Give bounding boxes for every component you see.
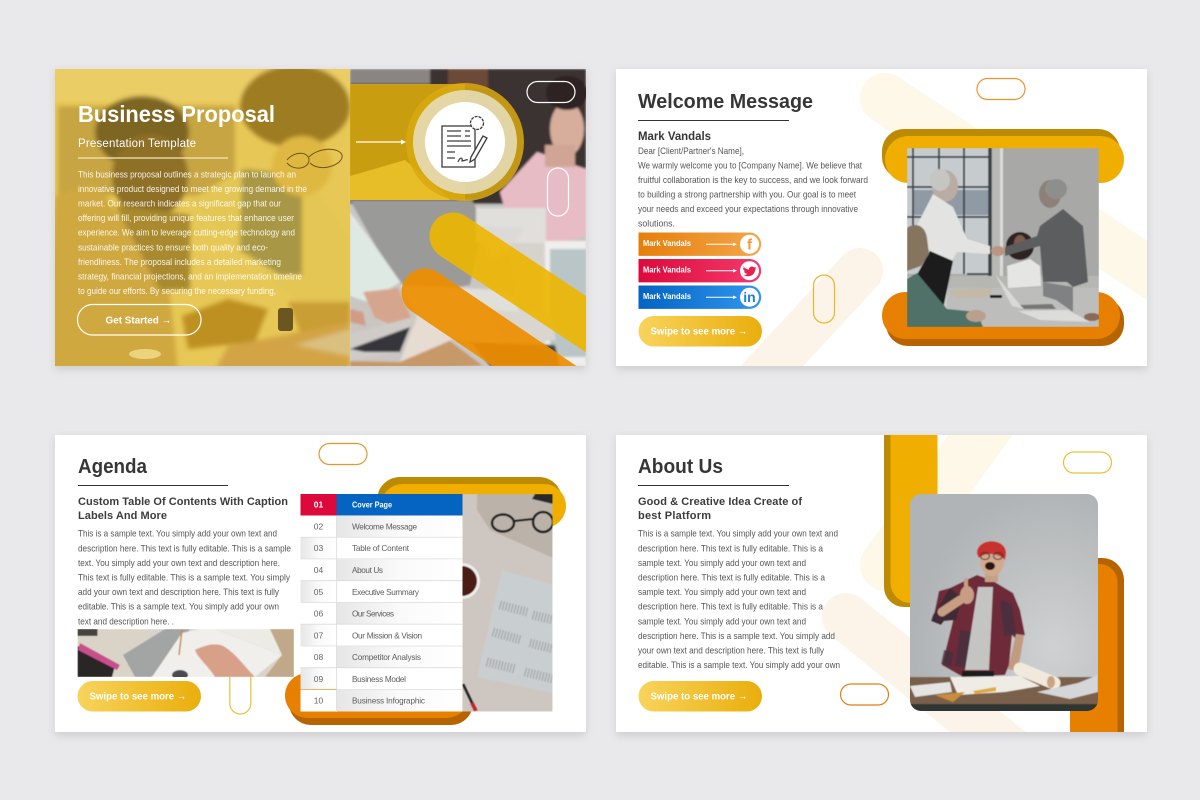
outline pill: top (319, 444, 367, 464)
text block: proposal description: friendliness. The proposal includes a detailed marketing (78, 257, 281, 267)
text block: agenda description: text. You simply add your own text and description here. (78, 558, 280, 568)
text block: proposal description: innovative product designed to meet the growing demand in the (78, 184, 307, 194)
button: swipe to see more (78, 681, 201, 712)
social bar: linkedin: Mark Vandals (643, 292, 692, 301)
title: About Us (638, 456, 723, 478)
outline pill: vertical (814, 275, 834, 323)
outline pill: bottom (840, 684, 888, 705)
blueprints and papers on desk (950, 676, 1040, 695)
row 1 highlighted: Cover Page (352, 501, 392, 510)
yellow overlay band (350, 84, 465, 200)
row 3: 03 (314, 543, 323, 553)
table: agenda contents (300, 494, 462, 712)
subheading (78, 497, 288, 519)
outline pill: top (977, 78, 1025, 100)
row 2: Welcome Message (352, 522, 417, 532)
text block: proposal description: to guide our efforts. By securing the necessary funding, (78, 286, 276, 296)
raised arm with thumb (942, 600, 960, 612)
row 5 (300, 581, 420, 602)
row 3: Table of Content (352, 544, 410, 553)
row 6: 06 (314, 608, 323, 618)
decorative stripe: pale lower diagonal (846, 617, 1010, 750)
social bar: twitter: Mark Vandals (643, 266, 692, 274)
text block: proposal description (78, 169, 307, 296)
social bar: facebook: Mark Vandals (643, 239, 692, 248)
text block: welcome letter: your needs and exceed your expectations through innovative (638, 204, 858, 214)
outline pill: top right (1064, 452, 1112, 473)
social bar: linkedin (638, 286, 761, 309)
text block: welcome letter: solutions. (638, 218, 675, 228)
laptop and table (996, 276, 1024, 309)
text block: proposal description: strategy, financial projections, and an implementation timeline (78, 272, 302, 282)
man in white shirt (932, 170, 958, 202)
row 5: 05 (314, 587, 323, 597)
row 4: 04 (314, 565, 323, 575)
decorative stripe: pale upper diagonal (885, 98, 1180, 292)
button: swipe to see more: Swipe to see more → (90, 690, 186, 702)
photo: colleagues under yellow overlay (45, 60, 355, 370)
text block: about description: sample text. You simply add your own text and (638, 616, 806, 626)
button: get started: Get Started → (106, 314, 172, 326)
woman seated centre (1006, 232, 1034, 260)
subtitle: Presentation Template (78, 138, 196, 150)
row 10: 10 (314, 696, 323, 706)
arrow: to icon (356, 140, 406, 144)
decorative stripe: pale upper diagonal (886, 400, 1006, 565)
title: Business Proposal (78, 101, 275, 127)
social bar: facebook: f (747, 236, 753, 254)
row 1 highlighted: 01 (314, 500, 323, 510)
photo: handshake in office (907, 148, 1100, 327)
text block: agenda description: add your own text and description here. This text is fully (78, 587, 279, 597)
button: swipe to see more: Swipe to see more → (650, 326, 748, 338)
row 8: Competitor Analysis (352, 653, 421, 662)
text block: proposal description: experience. We aim to leverage cutting-edge technology and (78, 228, 295, 238)
text block: welcome letter (638, 146, 868, 228)
text block: agenda description (78, 529, 291, 626)
decorative stripe: yellow diagonal (453, 236, 640, 360)
text block: proposal description: This business proposal outlines a strategic plan to launch an (78, 169, 296, 179)
subheading: Labels And More (78, 510, 167, 522)
row 3 (300, 538, 462, 558)
row 6: Our Services (352, 610, 394, 618)
backing shape: yellow roll (377, 477, 566, 528)
social bar: facebook (638, 232, 761, 256)
row 4 (314, 560, 462, 580)
panel: agenda slide (55, 435, 586, 732)
row 8 (314, 646, 462, 668)
woman foreground (907, 225, 929, 271)
subheading: Custom Table Of Contents With Caption (78, 496, 288, 508)
subheading (638, 496, 802, 522)
button: get started (78, 304, 201, 335)
button: swipe to see more (638, 681, 762, 712)
panel: about us slide (616, 400, 1147, 750)
row 4: About Us (352, 566, 383, 575)
icon: document with gear and pen badge (406, 83, 524, 201)
row 7: 07 (314, 630, 323, 640)
panel: business proposal cover slide (55, 69, 586, 366)
row 8: 08 (314, 652, 323, 662)
man in grey sweater (1039, 180, 1061, 208)
photo: smiling builder at desk (905, 490, 1103, 715)
row 2 (314, 516, 462, 537)
text block: welcome letter: Dear [Client/Partner's Name], (638, 146, 744, 156)
row 7 (300, 624, 422, 646)
text block: about description: description here. This text is fully editable. This is a (638, 543, 824, 553)
row 9: 09 (314, 674, 323, 684)
photo: office team with laptop and yellow band (350, 69, 588, 370)
backing shape: yellow bar (884, 425, 938, 607)
button: swipe to see more: Swipe to see more → (650, 690, 748, 702)
outline pill: vertical under photo (230, 677, 251, 714)
text block: about description: description here. This text is fully editable. This is a (638, 602, 824, 612)
text block: welcome letter: fruitful collaboration is the key to success, and we look forward (638, 175, 868, 185)
shirt (934, 575, 1025, 677)
row 10 (314, 690, 462, 712)
row 1 highlighted (300, 494, 462, 516)
other arm (1008, 634, 1024, 671)
text block: agenda description: This is a sample text. You simply add your own text and (78, 529, 277, 539)
row 10: Business Infographic (352, 696, 425, 706)
text block: about description: description here. This is a sample text. You simply add (638, 631, 835, 641)
text block: about description: This is a sample text. You simply add your own text and (638, 529, 838, 539)
photo: hand with pencil on charts (78, 629, 294, 680)
text block: welcome letter: to building a strong partnership with you. Our goal is to meet (638, 190, 856, 200)
social bar: twitter (638, 259, 761, 282)
backing shape: orange roll (285, 673, 473, 725)
decorative stripe: orange diagonal (425, 292, 570, 390)
decorative stripe: pale lower diagonal (745, 271, 860, 395)
title: Agenda (78, 456, 148, 478)
text block: welcome letter: We warmly welcome you to [Company Name]. We believe that (638, 160, 862, 170)
text block: agenda description: description here. This text is fully editable. This is a sample (78, 543, 291, 553)
scroll frame: top yellow roll (882, 129, 1124, 183)
text block: about description: sample text. You simply add your own text and (638, 587, 806, 597)
text block: proposal description: offering will fill, providing unique features that enhance user (78, 213, 294, 223)
subheading: best Platform (638, 510, 711, 522)
button: swipe to see more (638, 316, 762, 346)
text block: proposal description: market. Our research indicates a significant gap that our (78, 198, 281, 208)
glasses detail (287, 149, 342, 168)
text block: about description: description here. This text is fully editable. This is a (638, 572, 826, 582)
text block: agenda description: This text is fully editable. This is a sample text. You simply (78, 572, 290, 582)
subheading: Good & Creative Idea Create of (638, 496, 802, 508)
photo: desk with glasses, coffee and calendar (444, 494, 553, 712)
head and cap (985, 570, 998, 582)
heading: name: Mark Vandals (638, 129, 711, 143)
row 5: Executive Summary (352, 588, 420, 597)
text block: about description: your own text and description here. This text is fully (638, 646, 824, 656)
text block: proposal description: sustainable practices to ensure both quality and eco- (78, 242, 268, 252)
scroll frame: bottom orange roll (882, 292, 1124, 346)
text block: agenda description: editable. This is a sample text. You simply add your own (78, 602, 279, 612)
text block: about description: editable. This is a sample text. You simply add your own (638, 660, 840, 670)
outline pill: vertical (548, 168, 568, 216)
row 6 (314, 603, 462, 624)
row 2: 02 (314, 522, 323, 532)
row 7: Our Mission & Vision (352, 632, 422, 640)
backing shape: orange bar (1070, 558, 1124, 740)
text block: about description (638, 529, 840, 670)
row 9 (300, 668, 406, 689)
text block: about description: sample text. You simply add your own text and (638, 558, 806, 568)
outline pill: horizontal (527, 82, 575, 102)
title: Welcome Message (638, 91, 813, 113)
social bar: linkedin: in (743, 289, 756, 305)
row 9: Business Model (352, 675, 406, 684)
panel: welcome message slide (616, 69, 1147, 366)
text block: agenda description: text and description here. . (78, 616, 174, 626)
